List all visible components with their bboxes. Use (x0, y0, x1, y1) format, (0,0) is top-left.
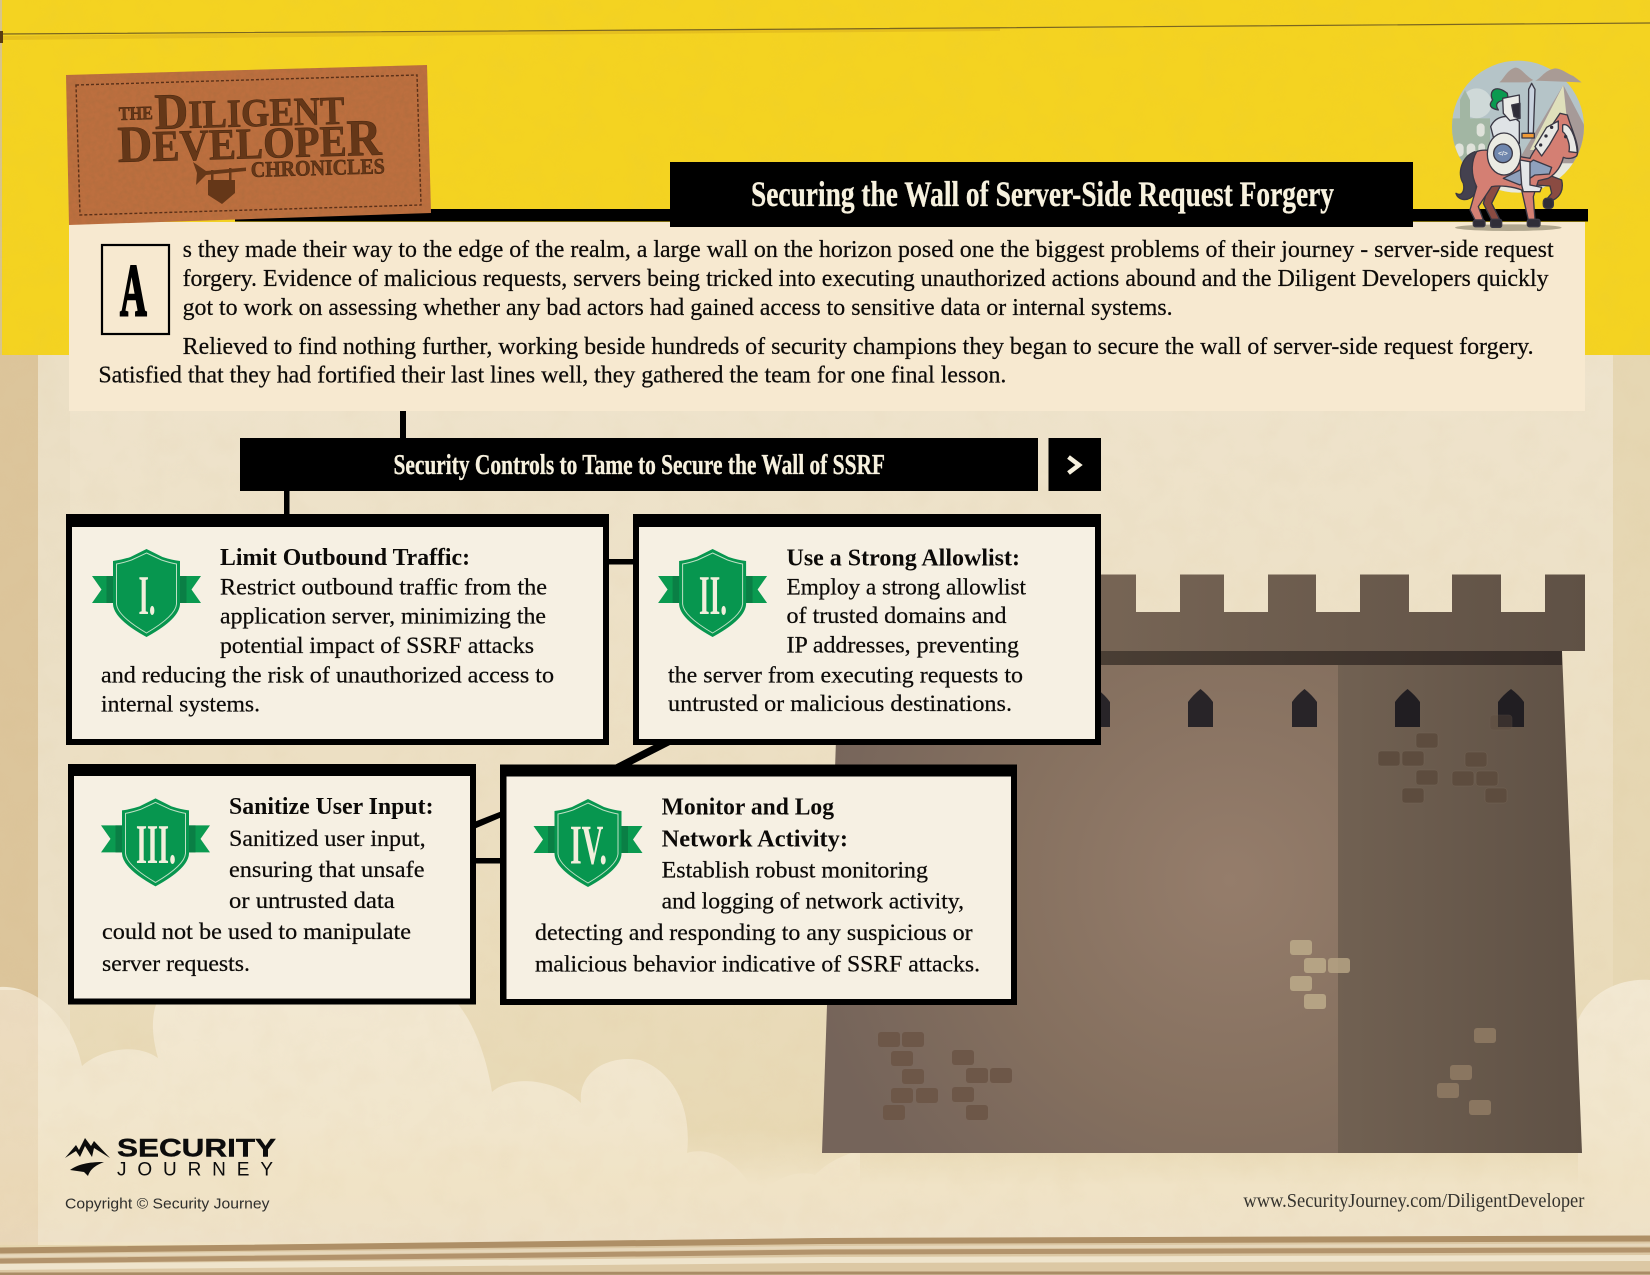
badge III: III. (136, 814, 176, 876)
castle: shadow band (1090, 651, 1562, 665)
panel IV text: Establish robust monitoring (662, 858, 928, 884)
panel III text: could not be used to manipulate (102, 919, 411, 945)
patch stitching (76, 75, 421, 215)
panel I text: potential impact of SSRF attacks (220, 633, 534, 659)
panel I text: internal systems. (101, 692, 260, 718)
panel I text: and reducing the risk of unauthorized access to (101, 663, 554, 689)
badge IV: IV. (570, 814, 607, 876)
castle: light bricks (1290, 940, 1350, 1009)
knight: horse armor (1535, 121, 1577, 156)
panel III text: Sanitized user input, (229, 826, 426, 852)
panel I text: Restrict outbound traffic from the (220, 574, 547, 600)
knight: tail (1456, 152, 1478, 200)
panel II text: the server from executing requests to (668, 663, 1023, 689)
copyright: Copyright © Security Journey (65, 1196, 270, 1212)
panel II text: Use a Strong Allowlist: (786, 546, 1020, 572)
title banner (670, 162, 1413, 227)
panel III text: Sanitize User Input: (229, 794, 434, 820)
intro panel (69, 222, 1585, 411)
website url: www.SecurityJourney.com/DiligentDeveloper (1243, 1190, 1585, 1212)
background: yellow cover (0, 0, 1650, 355)
panel III: sanitize user input (68, 764, 476, 1004)
panel IV text: Network Activity: (662, 826, 848, 852)
knight: far legs (1483, 172, 1562, 220)
intro text: Relieved to find nothing further, working beside hundreds of security champions they began to secure the wall of server-side request forgery. (183, 334, 1534, 360)
badge IV (534, 799, 642, 887)
knight: torso (1491, 116, 1519, 143)
panel II text: of trusted domains and (786, 603, 1007, 629)
panel II text: Employ a strong allowlist (786, 574, 1026, 600)
castle: upper dark bricks (1378, 715, 1512, 803)
background: stacked pages at the bottom (0, 1236, 1650, 1275)
intro text: got to work on assessing whether any bad actors had gained access to sensitive data or internal systems. (183, 295, 1173, 321)
title: Securing the Wall of Server-Side Request Forgery (751, 174, 1334, 214)
logo: mountain mark (65, 1138, 110, 1176)
panel I text: Limit Outbound Traffic: (220, 545, 470, 571)
logo wordmark: CHRONICLES (250, 153, 385, 182)
leather logo patch (60, 60, 435, 230)
panel IV text: and logging of network activity, (662, 889, 964, 915)
castle: lower right bricks (1437, 1028, 1496, 1115)
knight: leg and boot (1520, 160, 1542, 192)
panel IV text: Monitor and Log (662, 794, 834, 820)
logo wordmark (117, 80, 385, 182)
panel II text (668, 546, 1026, 717)
panel II text: untrusted or malicious destinations. (668, 691, 1012, 717)
logo: wordmark: SECURITY (117, 1134, 276, 1162)
intro text: s they made their way to the edge of the realm, a large wall on the horizon posed one the biggest problems of their journey - server-side request (183, 237, 1554, 263)
intro text (98, 237, 1554, 389)
knight: ground shadow (1455, 224, 1562, 231)
knight: sword (1528, 83, 1535, 133)
panel III text: server requests. (102, 951, 250, 977)
panel IV text (535, 794, 980, 977)
castle: battlements (1090, 574, 1585, 651)
castle wall (822, 574, 1585, 1153)
badge II (658, 549, 767, 637)
section heading: Security Controls to Tame to Secure the Wall of SSRF (394, 449, 885, 481)
castle: arrow slit windows (1085, 689, 1524, 727)
knight: horse body (1470, 113, 1578, 220)
black header rule (235, 209, 1588, 222)
panel IV text: detecting and responding to any suspicious or (535, 920, 973, 946)
logo: wordmark: JOURNEY (117, 1160, 273, 1180)
section heading bar (240, 438, 1038, 491)
logo wordmark: THE (119, 103, 153, 125)
drop cap letter: A (120, 249, 147, 331)
knight on horseback (1452, 61, 1585, 231)
badge I (92, 549, 201, 637)
castle: lower left dark bricks (878, 1032, 1012, 1120)
knight: helmet (1503, 95, 1520, 121)
background: clouds (0, 980, 1650, 1245)
knight: plume (1490, 89, 1508, 110)
castle: right face (1338, 651, 1582, 1153)
security journey logo (65, 1134, 276, 1180)
logo: wordmark (117, 1134, 276, 1180)
drop cap (102, 245, 169, 334)
panel IV: monitor and log (500, 764, 1017, 1005)
badge I: I. (138, 565, 156, 627)
panel IV text: malicious behavior indicative of SSRF attacks. (535, 951, 980, 977)
knight: shield code mark: </> (1498, 151, 1508, 158)
panel III text: ensuring that unsafe (229, 857, 424, 883)
knight: scenery (1452, 85, 1585, 195)
castle: left face (822, 651, 1338, 1153)
panel III text (102, 794, 434, 977)
panel II text: IP addresses, preventing (786, 632, 1019, 658)
badge III (101, 798, 210, 886)
panel I: limit outbound traffic (66, 514, 609, 745)
knight: hooves (1473, 198, 1553, 227)
logo: trumpet and banner (193, 162, 246, 204)
knight: clouds (1499, 68, 1582, 82)
arrow button (1048, 438, 1101, 491)
intro text: forgery. Evidence of malicious requests, servers being tricked into executing unauthorized actions abound and the Diligent Developers quickly (183, 266, 1549, 292)
connectors between panels (284, 411, 672, 864)
panel I text: application server, minimizing the (220, 604, 546, 630)
logo wordmark: DILIGENT (154, 80, 346, 141)
knight: shield (1487, 133, 1521, 175)
intro text: Satisfied that they had fortified their last lines well, they gathered the team for one final lesson. (98, 363, 1006, 389)
panel I text (101, 545, 554, 718)
panel III text: or untrusted data (229, 888, 395, 914)
panel II: strong allowlist (633, 514, 1101, 745)
badge II: II. (699, 565, 727, 627)
logo wordmark: DEVELOPER (117, 110, 384, 174)
